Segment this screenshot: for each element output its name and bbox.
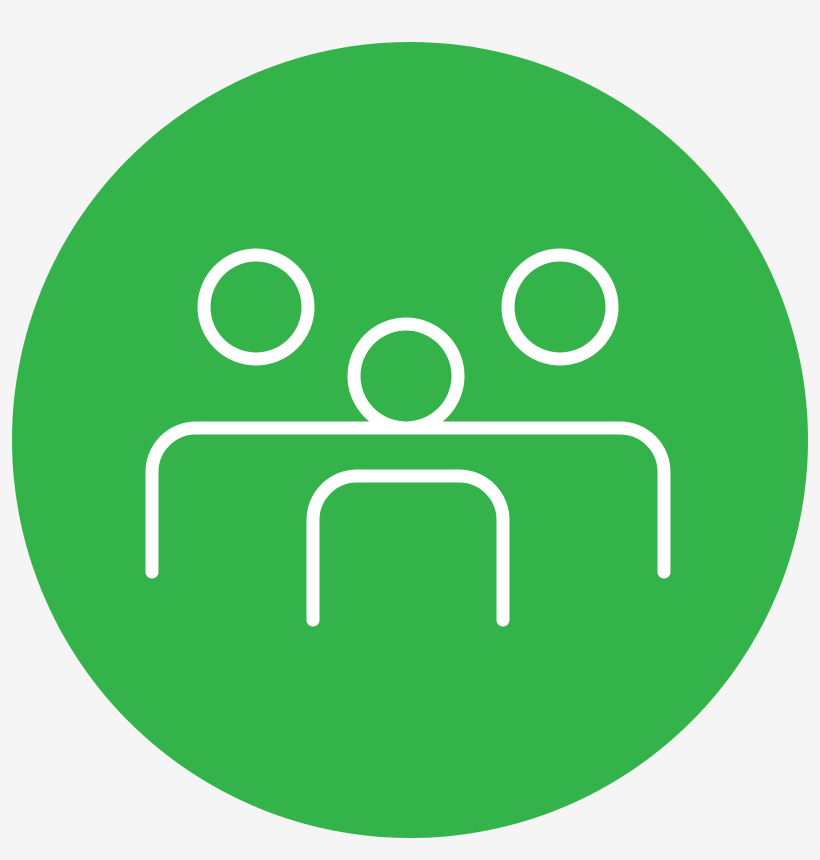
middle head — [354, 324, 458, 428]
outer shoulders — [152, 428, 664, 572]
right head — [508, 255, 612, 359]
left head — [204, 255, 308, 359]
people line icon — [152, 255, 664, 620]
inner body — [313, 476, 503, 620]
